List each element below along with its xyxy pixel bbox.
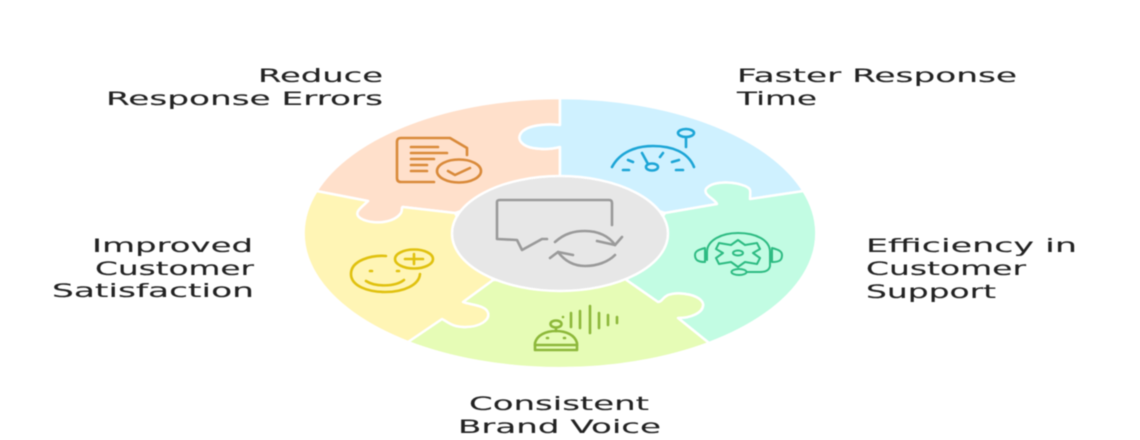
segment: faster response time (520, 98, 804, 213)
segment: improved customer satisfaction (304, 191, 493, 342)
icon: speech bubble with cycle arrows (497, 200, 622, 266)
icon: support headset with gear (695, 233, 782, 275)
label: efficiency in customer support (866, 235, 1077, 303)
label: improved customer satisfaction: Satisfaction (52, 280, 254, 302)
label: consistent brand voice: Consistent (469, 393, 649, 415)
label: reduce response errors: Reduce (258, 65, 383, 87)
label: improved customer satisfaction: Customer (95, 258, 254, 280)
label: reduce response errors: Response Errors (106, 88, 383, 110)
label: efficiency in customer support: Support (866, 281, 996, 303)
segment: consistent brand voice (408, 279, 709, 368)
icon: speedometer with pin (612, 129, 694, 170)
icon: document with check (397, 138, 481, 182)
label: faster response time (735, 65, 1017, 110)
label: consistent brand voice (458, 393, 661, 438)
label: faster response time: Faster Response (737, 65, 1017, 87)
segment: reduce response errors (316, 98, 560, 222)
label: improved customer satisfaction (52, 235, 254, 302)
icon: smiley with plus (351, 250, 433, 292)
label: faster response time: Time (735, 88, 817, 110)
label: reduce response errors (106, 65, 383, 110)
label: improved customer satisfaction: Improved (92, 235, 253, 257)
icon: robot with sound wave (535, 306, 617, 350)
label: efficiency in customer support: Customer (866, 258, 1026, 280)
label: efficiency in customer support: Efficiency in (866, 235, 1077, 257)
segment: efficiency in customer support (625, 183, 816, 343)
center circle (452, 176, 668, 291)
label: consistent brand voice: Brand Voice (458, 416, 661, 438)
